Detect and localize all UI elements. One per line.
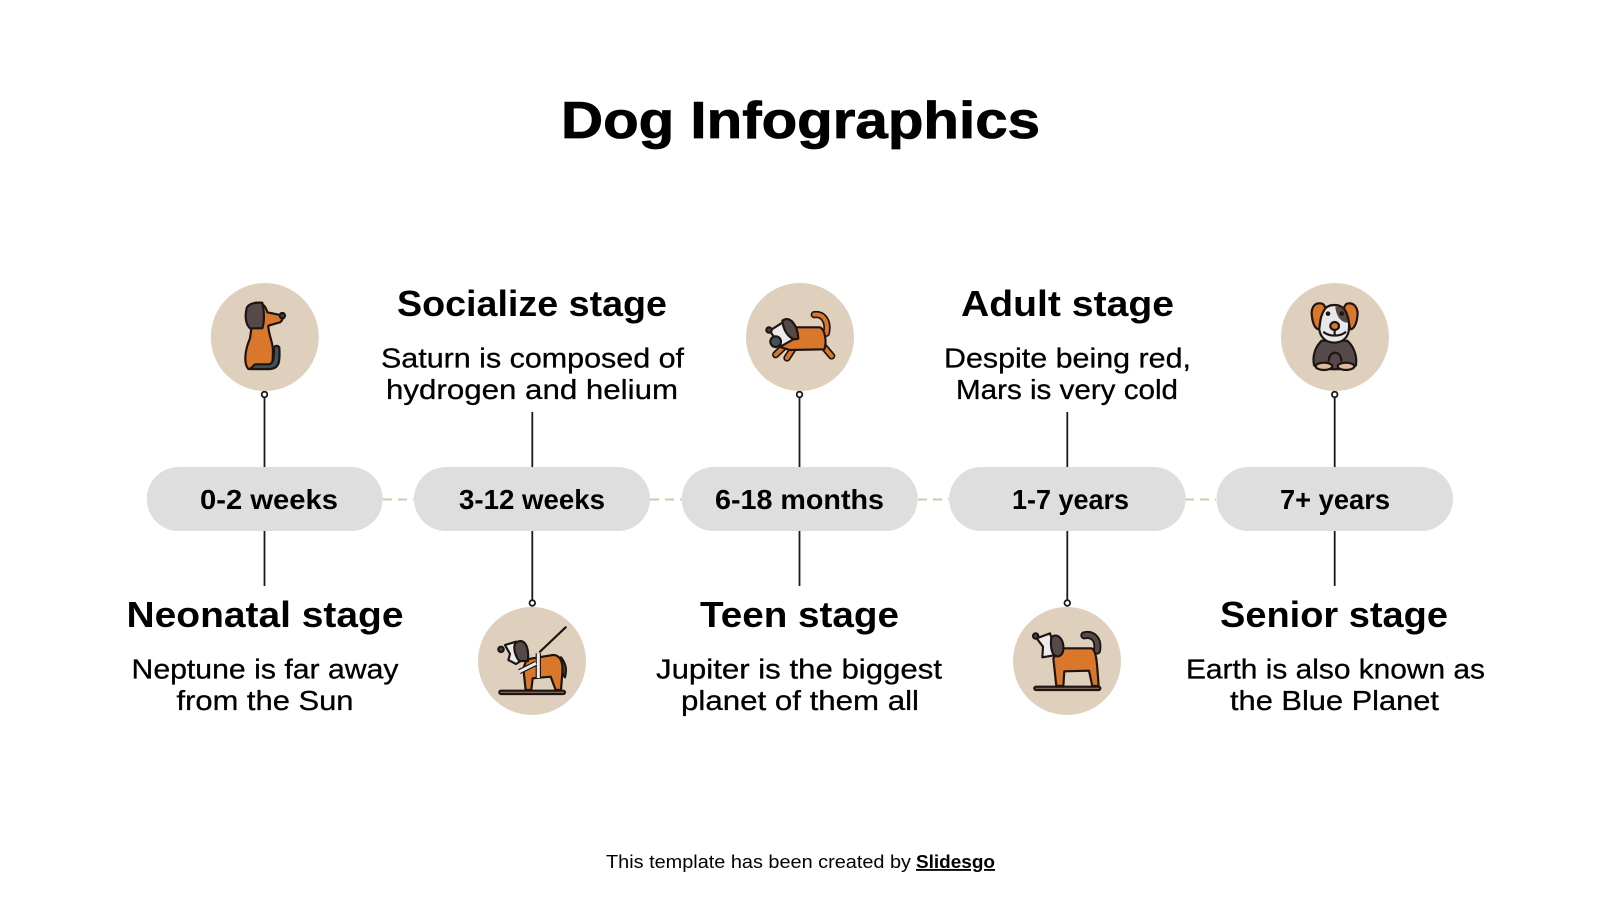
stage: Socialize [381,283,684,405]
icon: sitting dog facing front [1281,283,1389,391]
timeline connectors [383,498,1216,500]
stage: Teen: planet of them all [681,685,919,716]
stage: Neonatal: Neonatal stage [126,594,404,635]
icon: dog on leash [478,607,586,715]
stage: Neonatal [126,594,404,716]
stage: Adult [944,283,1191,405]
stage: Senior: Senior stage [1220,594,1448,635]
footer credit: Slidesgo [916,851,995,872]
icon: sitting dog [211,283,319,391]
stage: Adult: Mars is very cold [956,374,1178,405]
pill: 3-12 weeks: 3-12 weeks [459,484,605,515]
stage: Senior: Earth is also known as [1186,654,1485,684]
stage: Teen: Teen stage [700,594,899,635]
icon: standing dog [1013,607,1121,715]
stage: Adult: Adult stage [961,283,1174,324]
title: Dog Infographics [561,92,1040,150]
pill: 3-12 weeks [414,467,650,531]
pill: 1-7 years [949,467,1186,531]
stage: Senior: the Blue Planet [1230,685,1439,716]
stage: Neonatal: from the Sun [176,685,354,716]
stage: Teen [656,594,942,716]
pill: 1-7 years: 1-7 years [1012,484,1129,515]
stage: Neonatal: Neptune is far away [132,654,398,684]
stage: Socialize: Saturn is composed of [381,342,684,374]
icon: running dog [746,283,854,391]
pill: 6-18 months: 6-18 months [715,484,884,515]
pill: 6-18 months [682,467,918,531]
pill: 0-2 weeks: 0-2 weeks [200,484,338,515]
stage: Socialize: hydrogen and helium [386,374,678,405]
pill: 0-2 weeks [147,467,383,531]
pill: 7+ years: 7+ years [1280,484,1390,515]
stem lines and dots [262,392,1338,606]
stage: Socialize: Socialize stage [397,283,667,324]
stage: Senior [1186,594,1485,716]
footer credit: This template has been created by [606,851,912,872]
stage: Adult: Despite being red, [944,342,1191,374]
stage: Teen: Jupiter is the biggest [656,654,942,684]
pill: 7+ years [1216,467,1453,531]
